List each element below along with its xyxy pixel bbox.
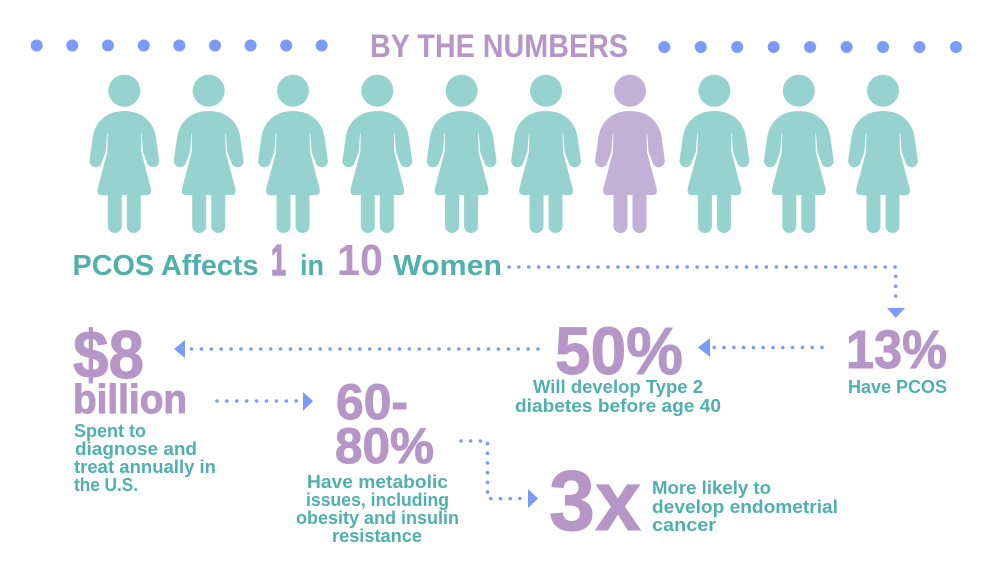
stat: 60-80%: 60- bbox=[336, 374, 408, 430]
pictogram: 1 in 10 women bbox=[89, 75, 918, 233]
stat: 3x: develop endometrial bbox=[652, 496, 838, 517]
headline: PCOS affects 1 in 10 women bbox=[72, 236, 502, 285]
arrow: headline to 13% bbox=[509, 267, 905, 318]
stat: 3x: cancer bbox=[652, 514, 716, 535]
stat: $8 billion: diagnose and bbox=[75, 438, 197, 459]
headline: PCOS affects 1 in 10 women: 1 bbox=[271, 236, 286, 285]
stat: $8 billion: the U.S. bbox=[74, 474, 138, 495]
headline: PCOS affects 1 in 10 women: 10 bbox=[337, 236, 383, 285]
arrow: 13% to 50% bbox=[698, 338, 822, 357]
stat: $8 billion: billion bbox=[73, 376, 187, 422]
stat: 50%: diabetes before age 40 bbox=[515, 395, 721, 416]
headline: PCOS affects 1 in 10 women: Women bbox=[393, 250, 502, 282]
stat: $8 billion bbox=[73, 317, 216, 495]
headline: PCOS affects 1 in 10 women: PCOS Affects bbox=[72, 250, 258, 282]
stat: 60-80%: issues, including bbox=[306, 489, 449, 510]
stat: 60-80%: 80% bbox=[335, 418, 434, 474]
stat: 50%: 50% bbox=[555, 314, 683, 389]
right dotted title ornament bbox=[658, 41, 962, 53]
stat: 60-80%: Have metabolic bbox=[307, 471, 448, 492]
stat: 3x bbox=[549, 454, 838, 549]
stat: $8 billion: $8 bbox=[73, 317, 144, 393]
stat: 60-80%: obesity and insulin bbox=[296, 507, 459, 528]
headline: PCOS affects 1 in 10 women: in bbox=[300, 250, 324, 282]
title: BY THE NUMBERS bbox=[370, 28, 628, 64]
stat: $8 billion: Spent to bbox=[74, 420, 146, 441]
stat: 13%: Have PCOS bbox=[848, 376, 947, 397]
arrow: $8 billion to 60-80% bbox=[217, 392, 313, 411]
arrow: 60-80% to 3x bbox=[461, 441, 538, 508]
stat: 60-80% bbox=[296, 374, 459, 546]
stat: 3x: 3x bbox=[549, 454, 641, 549]
stat: 50% bbox=[515, 314, 721, 416]
stat: 13%: 13% bbox=[846, 320, 947, 380]
arrow: 50% to $8 billion bbox=[174, 340, 538, 358]
stat: 60-80%: resistance bbox=[332, 525, 422, 546]
stat: 3x: More likely to bbox=[652, 477, 771, 498]
stat: $8 billion: treat annually in bbox=[74, 456, 216, 477]
stat: 50%: Will develop Type 2 bbox=[533, 376, 703, 397]
left dotted title ornament bbox=[31, 40, 328, 52]
